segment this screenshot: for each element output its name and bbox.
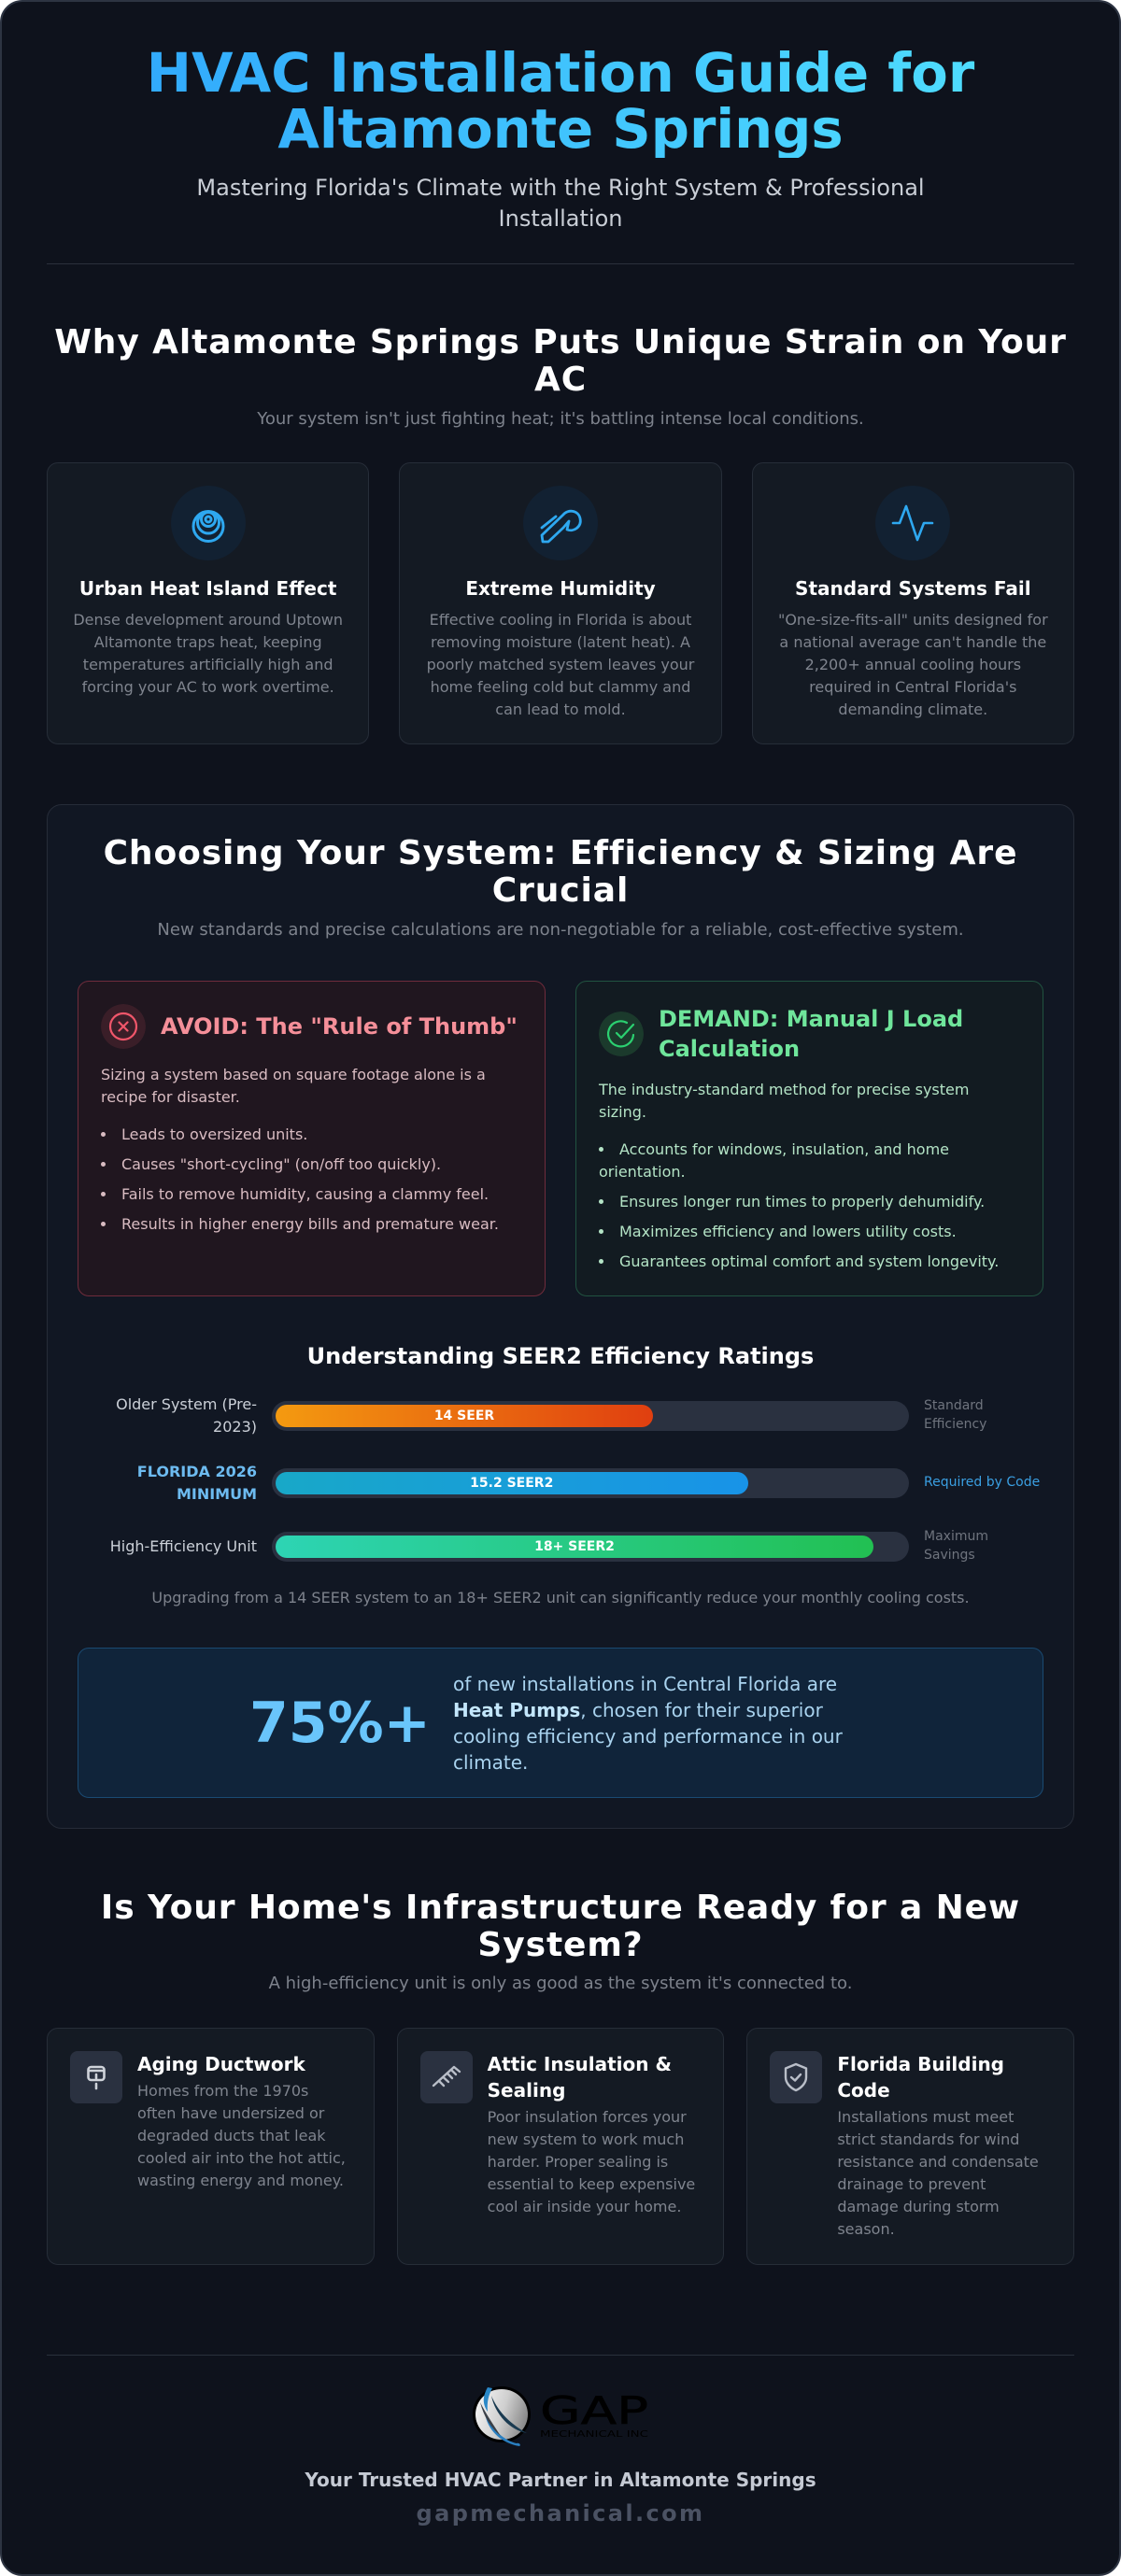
card text	[488, 2108, 695, 2215]
bar note: maximum savings: Maximum	[924, 1529, 988, 1544]
demand intro: sizing.	[599, 1103, 646, 1121]
card text: Homes from the 1970s	[137, 2082, 308, 2100]
bar note: standard efficiency: Standard	[924, 1398, 984, 1413]
card text: temperatures artificially high and	[83, 656, 333, 673]
demand intro	[598, 1081, 969, 1121]
avoid list: Leads to oversized units.	[121, 1125, 307, 1143]
bar note: required by code: Required by Code	[924, 1475, 1040, 1490]
card text: new system to work much	[488, 2130, 684, 2148]
section heading: infrastructure: System?	[477, 1926, 644, 1964]
callout text: of new installations in Central Florida are	[453, 1673, 837, 1695]
card text: cool air inside your home.	[488, 2198, 681, 2215]
panel: avoid rule of thumb	[78, 981, 546, 1296]
subtitle: Installation	[499, 205, 622, 232]
avoid intro	[101, 1066, 486, 1106]
title: HVAC Installation Guide for	[147, 42, 974, 105]
card text: can lead to mold.	[495, 701, 626, 718]
card text: degraded ducts that leak	[137, 2127, 326, 2144]
bar: 14 SEER	[272, 1401, 909, 1431]
card text: Effective cooling in Florida is about	[430, 611, 691, 629]
icon: concentric heat rings	[171, 486, 246, 560]
avoid list: Results in higher energy bills and premature wear.	[121, 1215, 499, 1233]
big stat: 75%+	[249, 1691, 431, 1756]
card text: a national average can't handle the	[779, 633, 1046, 651]
card: urban heat island	[47, 462, 369, 744]
avoid list: Causes "short-cycling" (on/off too quickly).	[121, 1155, 441, 1173]
bar: 15.2 SEER2: 15.2 SEER2	[470, 1476, 553, 1491]
avoid intro: Sizing a system based on square footage alone is a	[101, 1066, 486, 1083]
card text: demanding climate.	[838, 701, 987, 718]
card text: home feeling cold but clammy and	[431, 678, 690, 696]
bar: 18+ SEER2: 18+ SEER2	[534, 1539, 615, 1554]
card text	[137, 2082, 346, 2189]
card text	[427, 611, 695, 718]
section subheading: standards: New standards and precise calculations are non-negotiable for a reliable, cost-effective system.	[157, 920, 964, 940]
icon: check in circle	[599, 1012, 644, 1056]
bar label: Florida 2026 minimum: MINIMUM	[177, 1485, 257, 1503]
icon: x in circle	[101, 1004, 146, 1049]
section subheading: connected system: A high-efficiency unit is only as good as the system it's connected to.	[269, 1974, 852, 1993]
bar label: high efficiency unit: High-Efficiency Unit	[110, 1537, 257, 1555]
panel: choosing your system	[47, 804, 1074, 1829]
bar label: Florida 2026 minimum	[137, 1463, 257, 1503]
card text: damage during storm	[837, 2198, 1000, 2215]
card content	[837, 2053, 1039, 2238]
card text: cooled air into the hot attic,	[137, 2149, 346, 2167]
bar label: older system: Older System (Pre-	[116, 1395, 257, 1413]
card title: Sealing	[488, 2079, 565, 2102]
section heading: why Altamonte Springs: AC	[534, 361, 587, 399]
card text: poorly matched system leaves your	[427, 656, 694, 673]
card text: resistance and condensate	[837, 2153, 1039, 2171]
bar: 18+ SEER2	[272, 1532, 909, 1562]
demand title	[659, 1006, 963, 1062]
card: standard systems fail	[752, 462, 1074, 744]
card: extreme humidity	[399, 462, 722, 744]
demand title: Calculation	[659, 1036, 800, 1062]
card text: often have undersized or	[137, 2104, 324, 2122]
wordmark	[540, 2388, 648, 2440]
card text: drainage to prevent	[837, 2175, 986, 2193]
footer tagline: Your Trusted HVAC Partner in Altamonte Springs	[305, 2469, 816, 2491]
chart heading: SEER2 ratings: Understanding SEER2 Efficiency Ratings	[307, 1343, 814, 1369]
chart caption: Upgrading from a 14 SEER system to an 18+ SEER2 unit can significantly reduce your monthly cooling costs.	[151, 1589, 970, 1606]
card text: Altamonte traps heat, keeping	[94, 633, 322, 651]
demand title: DEMAND: Manual J Load	[659, 1006, 963, 1032]
card title: Code	[837, 2079, 890, 2102]
section heading: infrastructure: Is Your Home's Infrastructure Ready for a New	[101, 1889, 1020, 1927]
section heading: infrastructure	[101, 1889, 1020, 1964]
card text: 2,200+ annual cooling hours	[805, 656, 1021, 673]
bar: 15.2 SEER2	[272, 1468, 909, 1498]
section heading: choosing your system: Choosing Your System: Efficiency & Sizing Are	[104, 834, 1017, 872]
demand list	[599, 1140, 999, 1270]
bar note: standard efficiency	[924, 1398, 986, 1432]
icon: humidity hook	[523, 486, 598, 560]
footer URL: gapmechanical.com	[417, 2500, 704, 2526]
demand heading	[599, 1006, 963, 1062]
card text	[837, 2108, 1039, 2238]
card text: "One-size-fits-all" units designed for	[778, 611, 1048, 629]
card text: essential to keep expensive	[488, 2175, 695, 2193]
demand list: orientation.	[599, 1163, 686, 1181]
callout text: climate.	[453, 1751, 528, 1774]
card text	[778, 611, 1048, 718]
subtitle: Mastering Florida's Climate with the Right System & Professional	[196, 175, 925, 201]
card title: Urban Heat Island Effect	[79, 577, 336, 600]
card title: Standard Systems Fail	[795, 577, 1031, 600]
bar label: older system	[116, 1395, 257, 1436]
demand list: Ensures longer run times to properly dehumidify.	[619, 1193, 985, 1210]
section heading: choosing your system: Crucial	[492, 871, 629, 910]
card text: harder. Proper sealing is	[488, 2153, 668, 2171]
avoid list	[101, 1125, 499, 1233]
icon: shield check	[770, 2051, 822, 2103]
bar: 14 SEER: 14 SEER	[434, 1408, 494, 1423]
card text: Installations must meet	[837, 2108, 1014, 2126]
section heading: why Altamonte Springs	[54, 323, 1067, 399]
bar label: Florida 2026 minimum: FLORIDA 2026	[137, 1463, 257, 1480]
card content	[488, 2053, 695, 2215]
section heading: choosing your system	[104, 834, 1017, 910]
card text: strict standards for wind	[837, 2130, 1019, 2148]
demand intro: The industry-standard method for precise system	[599, 1081, 969, 1098]
card text: Dense development around Uptown	[73, 611, 343, 629]
wordmark: MECHANICAL INC	[540, 2429, 648, 2440]
card text: required in Central Florida's	[809, 678, 1016, 696]
icon: insulation comb	[420, 2051, 473, 2103]
panel: demand manual J	[575, 981, 1043, 1296]
section subheading: local conditions: Your system isn't just fighting heat; it's battling intense local conditions.	[257, 409, 864, 429]
sphere	[473, 2386, 531, 2446]
card title: Florida Building	[837, 2053, 1004, 2075]
demand list: Maximizes efficiency and lowers utility costs.	[619, 1223, 957, 1240]
bar note: standard efficiency: Efficiency	[924, 1417, 986, 1432]
wordmark: GAP	[540, 2388, 648, 2433]
icon: duct	[70, 2051, 122, 2103]
title	[45, 46, 1076, 158]
bar label: older system: 2023)	[213, 1418, 257, 1436]
demand list: Guarantees optimal comfort and system longevity.	[619, 1253, 999, 1270]
logo: GAP Mechanical	[473, 2386, 648, 2446]
card text	[73, 611, 343, 696]
callout text: Heat Pumps, chosen for their superior	[453, 1699, 823, 1721]
callout: 75% heat pumps	[78, 1648, 1043, 1798]
card text: Poor insulation forces your	[488, 2108, 687, 2126]
avoid heading	[101, 1004, 518, 1049]
avoid title: AVOID: The "Rule of Thumb"	[161, 1013, 518, 1040]
callout text	[453, 1673, 843, 1774]
avoid list: Fails to remove humidity, causing a clammy feel.	[121, 1185, 489, 1203]
card text: forcing your AC to work overtime.	[82, 678, 334, 696]
card text: removing moisture (latent heat). A	[431, 633, 690, 651]
card: aging ductwork	[47, 2028, 375, 2265]
title: Altamonte Springs	[277, 98, 844, 161]
icon: pulse line	[875, 486, 950, 560]
card title: Extreme Humidity	[465, 577, 656, 600]
card title	[837, 2053, 1004, 2102]
avoid intro: recipe for disaster.	[101, 1088, 240, 1106]
demand list: Accounts for windows, insulation, and home	[619, 1140, 949, 1158]
card text: season.	[837, 2220, 895, 2238]
card: Florida building code	[746, 2028, 1074, 2265]
card content	[137, 2053, 346, 2189]
bar note: maximum savings: Savings	[924, 1548, 975, 1563]
card title: Attic Insulation &	[488, 2053, 672, 2075]
card text: wasting energy and money.	[137, 2172, 344, 2189]
callout text: cooling efficiency and performance in our	[453, 1725, 843, 1748]
bar note: maximum savings	[924, 1529, 988, 1563]
card title	[488, 2053, 672, 2102]
card: attic insulation	[397, 2028, 724, 2265]
section heading: why Altamonte Springs: Why Altamonte Springs Puts Unique Strain on Your	[54, 323, 1067, 361]
subtitle	[196, 175, 925, 232]
card title: Aging Ductwork	[137, 2053, 305, 2075]
